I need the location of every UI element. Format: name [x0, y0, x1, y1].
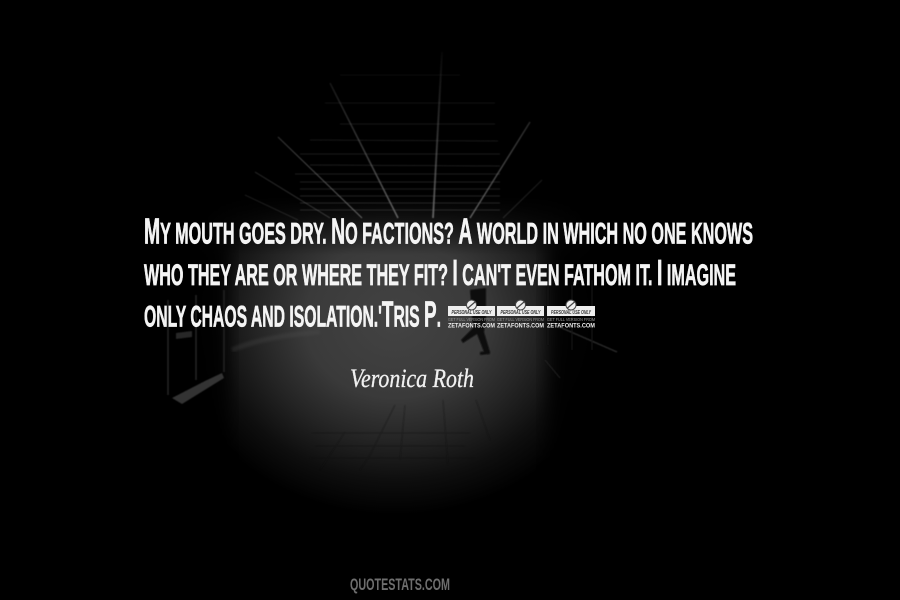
ceiling light strips: [245, 52, 542, 220]
left shelves: [168, 290, 224, 404]
author name: Veronica Roth: [350, 364, 474, 393]
placeholder glyph: personal use only 1: GET FULL VERSION FROM: [448, 317, 495, 322]
placeholder glyph: personal use only 3: PERSONAL USE ONLY: [551, 310, 591, 316]
right shelves: [545, 280, 617, 378]
floor tiles: [310, 400, 490, 470]
placeholder glyph: personal use only 3: [547, 300, 595, 330]
quote line 2: WHO THEY ARE OR WHERE THEY FIT? I CAN'T EVEN FATHOM IT. I IMAGINE: [144, 252, 736, 293]
source watermark: QUOTESTATS.COM: [350, 575, 450, 594]
icon: silhouette of a running figure: [461, 288, 490, 355]
placeholder glyph: personal use only 2: GET FULL VERSION FROM: [497, 317, 544, 322]
placeholder glyph: personal use only 1: ZETAFONTS.COM: [448, 322, 495, 330]
quote line 3: ONLY CHAOS AND ISOLATION.'TRIS P.: [144, 294, 441, 334]
placeholder glyph: personal use only 3: GET FULL VERSION FROM: [547, 317, 595, 322]
placeholder glyph: personal use only 2: [497, 300, 544, 330]
quote text: [144, 210, 753, 334]
placeholder glyph: personal use only 3: ZETAFONTS.COM: [547, 322, 595, 330]
placeholder glyph: personal use only 2: PERSONAL USE ONLY: [500, 310, 541, 316]
placeholder glyph: personal use only 2: ZETAFONTS.COM: [497, 322, 544, 330]
left wall light edge: [232, 332, 320, 350]
placeholder glyph: personal use only 1: [448, 300, 495, 330]
placeholder glyph: personal use only 1: PERSONAL USE ONLY: [452, 310, 492, 316]
